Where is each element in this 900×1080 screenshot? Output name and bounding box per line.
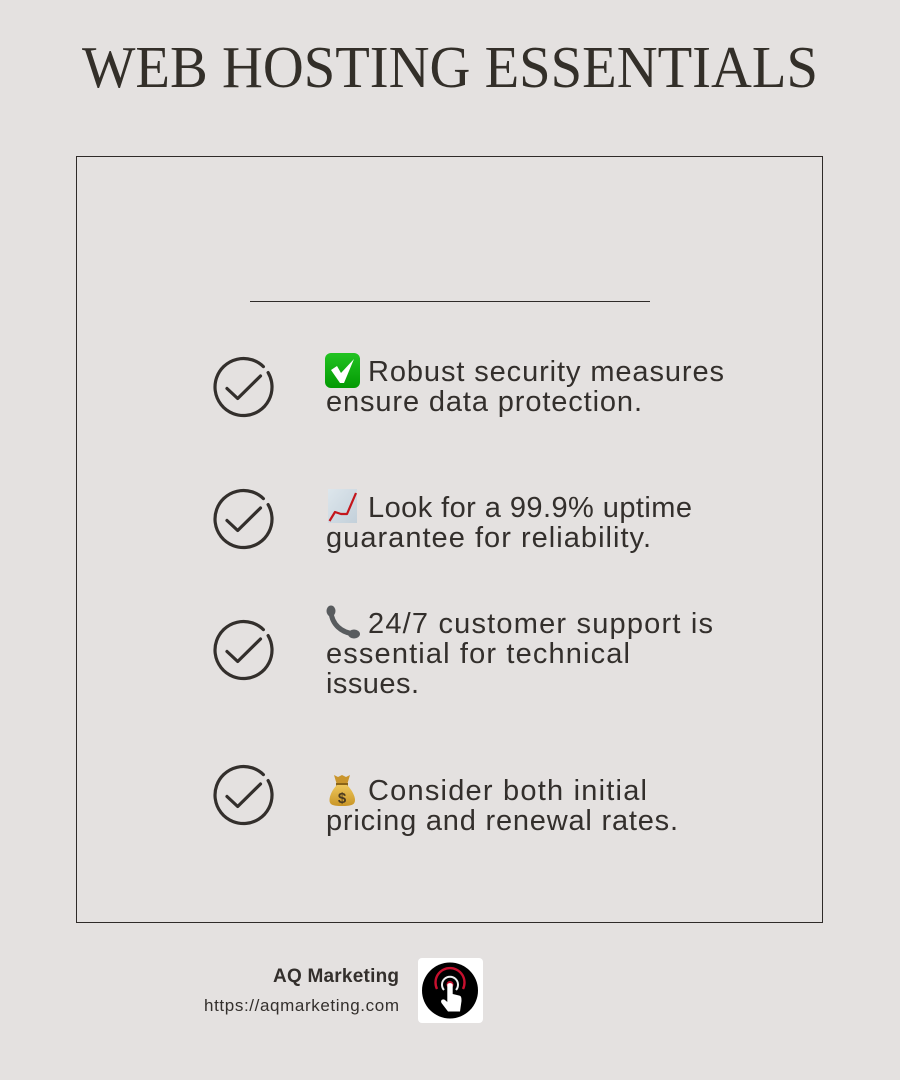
- icon: check circle 2: [215, 491, 272, 548]
- text: uptime: guarantee for reliability.: [326, 522, 651, 554]
- text: support: [326, 608, 713, 700]
- text: uptime: Look for a 99.9% uptime: [368, 492, 692, 524]
- text: security: ensure data protection.: [326, 386, 642, 418]
- text: support: 24/7 customer support is: [368, 608, 713, 640]
- icon: chart emoji: [328, 489, 357, 523]
- text: support: essential for technical: [326, 638, 630, 670]
- title: WEB HOSTING ESSENTIALS: [82, 34, 818, 100]
- icon: green check emoji: [325, 353, 360, 388]
- icon: telephone emoji: [326, 606, 360, 638]
- footer: brand name: AQ Marketing: [273, 966, 399, 987]
- text: pricing: pricing and renewal rates.: [326, 805, 678, 837]
- icon: money bag emoji: $: [338, 790, 347, 807]
- icon: check circle 4: [215, 767, 272, 824]
- text: uptime: [326, 492, 692, 554]
- text: pricing: Consider both initial: [368, 775, 647, 807]
- icon: logo: [418, 958, 483, 1023]
- text: pricing: [326, 775, 678, 837]
- text: support: issues.: [326, 668, 419, 700]
- icon: check circle 1: [215, 359, 272, 416]
- icon: money bag emoji: [330, 775, 355, 807]
- panel: content frame: [76, 156, 822, 922]
- text: security: Robust security measures: [368, 356, 724, 388]
- text: security: [326, 356, 724, 418]
- icon: check circle 3: [215, 622, 272, 679]
- footer: url: https://aqmarketing.com: [204, 996, 399, 1015]
